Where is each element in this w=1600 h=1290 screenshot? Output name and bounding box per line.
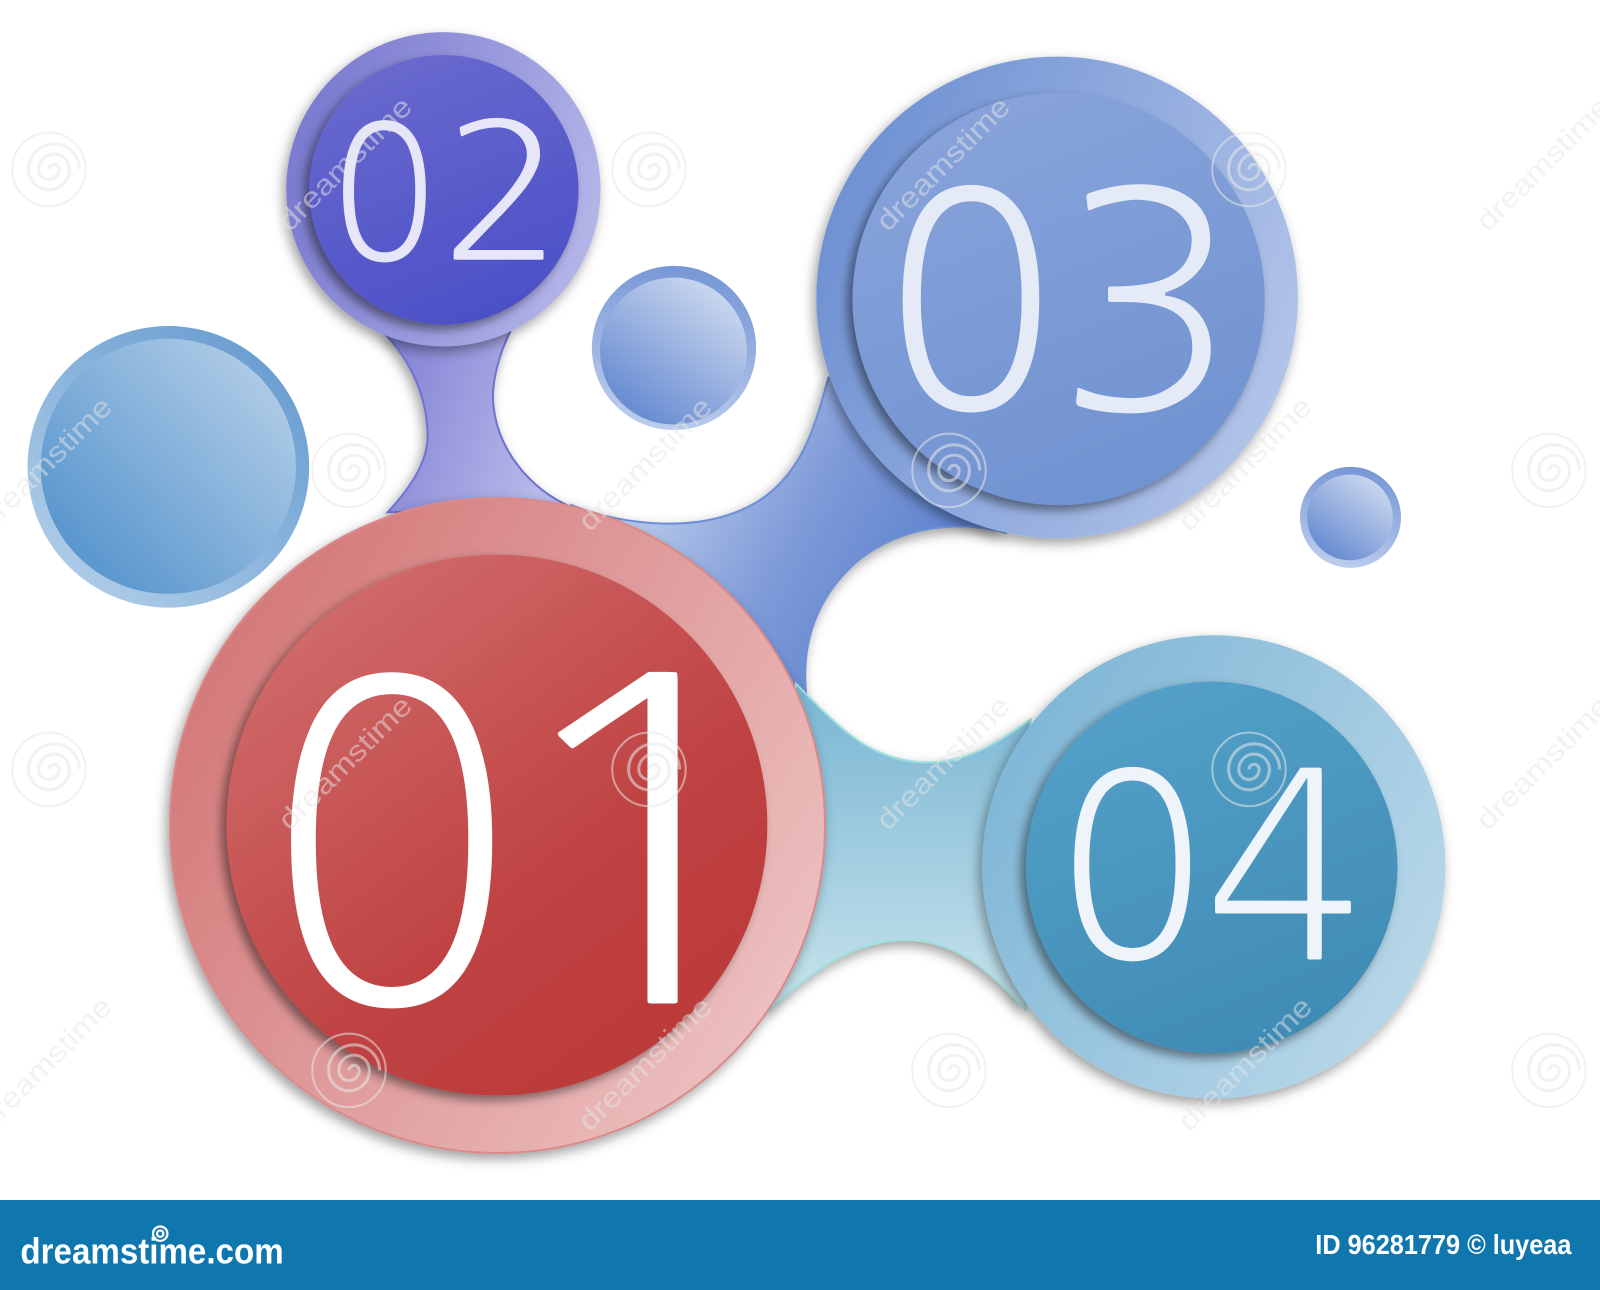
watermark pattern: dreamstime <box>1470 91 1600 238</box>
connector: 02 to 01 <box>383 332 571 512</box>
watermark pattern: dreamstime <box>1172 991 1319 1138</box>
number 04: 0 <box>1058 737 1205 999</box>
circle 04 <box>982 635 1445 1098</box>
number 01: 0 <box>262 621 519 1075</box>
number 03 <box>884 151 1239 456</box>
number 03: 3 <box>1055 151 1239 456</box>
number 02: 0 <box>332 100 436 290</box>
icon: footer swirl <box>153 1226 167 1241</box>
watermark pattern: dreamstime <box>572 391 719 538</box>
watermark pattern: dreamstime <box>870 91 1017 238</box>
footer credit: ID 96281779 © luyeaa <box>1315 1229 1572 1260</box>
number 01 <box>262 618 817 1075</box>
watermark pattern: dreamstime <box>572 991 719 1138</box>
number 03: 0 <box>884 151 1056 456</box>
circle 01 <box>170 498 825 1153</box>
watermark pattern: dreamstime <box>272 690 419 837</box>
footer bar <box>0 1200 1600 1290</box>
connector: 03 to 01 <box>571 378 1005 714</box>
number 02 <box>332 98 564 290</box>
number 04: 4 <box>1205 736 1361 998</box>
connector: 04 to 01 <box>770 684 1031 1010</box>
circle 02 <box>286 32 601 346</box>
number 04 <box>1058 736 1361 999</box>
circle 03 <box>816 57 1298 538</box>
watermark pattern: dreamstime <box>272 91 419 238</box>
watermark pattern: dreamstime <box>870 690 1017 837</box>
number 02: 2 <box>440 98 564 288</box>
number 01: 1 <box>473 618 817 1072</box>
bubble: middle <box>592 266 756 430</box>
bubble: large left <box>28 326 309 608</box>
watermark pattern: dreamstime <box>1172 391 1319 538</box>
watermark pattern: dreamstime <box>1470 690 1600 837</box>
footer logo text: dreamstime.com <box>20 1231 284 1271</box>
bubble: small right <box>1300 467 1401 568</box>
